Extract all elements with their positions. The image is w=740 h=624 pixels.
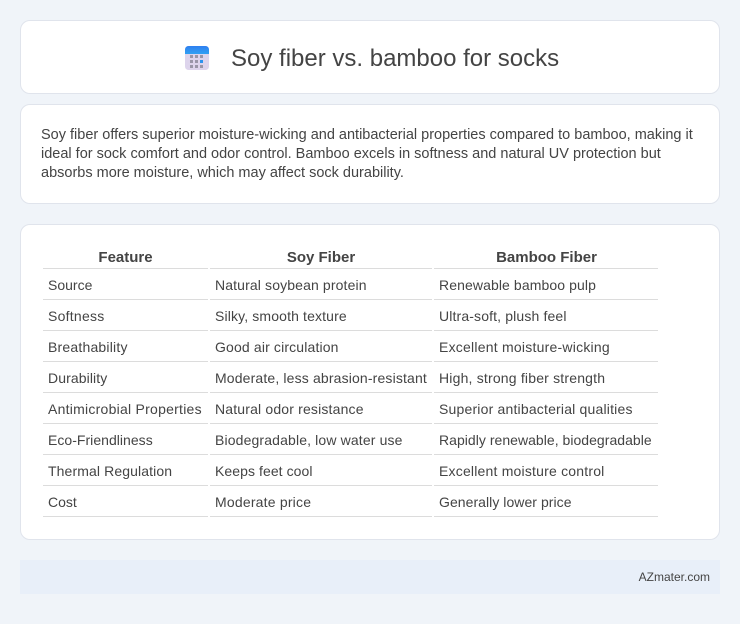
row: Source: Source xyxy=(48,277,92,293)
icon: calendar xyxy=(185,46,209,70)
row: Softness xyxy=(48,308,567,324)
panel: comparison table card xyxy=(20,224,720,540)
header: Bamboo Fiber: Bamboo Fiber xyxy=(496,249,597,266)
row: Softness: Ultra-soft, plush feel xyxy=(439,308,567,324)
row: Cost xyxy=(48,494,572,510)
row: Source: Renewable bamboo pulp xyxy=(439,277,596,293)
title: Soy fiber vs. bamboo for socks xyxy=(231,45,559,72)
row: Durability: Moderate, less abrasion-resistant xyxy=(215,370,427,386)
row: Eco-Friendliness xyxy=(48,432,652,448)
footer bar xyxy=(20,560,720,594)
panel: title card xyxy=(20,20,720,94)
summary text xyxy=(41,127,693,181)
row: Durability: Durability xyxy=(48,370,107,386)
row: Source: Natural soybean protein xyxy=(215,277,367,293)
row: Breathability xyxy=(48,339,610,355)
row: Breathability: Excellent moisture-wicking xyxy=(439,339,610,355)
row: Cost: Cost xyxy=(48,494,77,510)
summary text: Soy fiber offers superior moisture-wicking and antibacterial properties compared to bamboo, making it xyxy=(41,127,693,143)
row: Eco-Friendliness: Eco-Friendliness xyxy=(48,432,153,448)
row: Thermal Regulation: Keeps feet cool xyxy=(215,463,313,479)
row: Thermal Regulation: Excellent moisture control xyxy=(439,463,604,479)
row: Antimicrobial Properties: Superior antibacterial qualities xyxy=(439,401,633,417)
row: Antimicrobial Properties xyxy=(48,401,633,417)
row: Eco-Friendliness: Biodegradable, low water use xyxy=(215,432,403,448)
footer credit: AZmater.com xyxy=(639,570,710,584)
row: Source xyxy=(48,277,596,293)
header: Soy Fiber: Soy Fiber xyxy=(287,249,355,266)
row: Softness: Silky, smooth texture xyxy=(215,308,347,324)
row: Cost: Generally lower price xyxy=(439,494,572,510)
row: Antimicrobial Properties: Natural odor resistance xyxy=(215,401,364,417)
summary text: ideal for sock comfort and odor control. Bamboo excels in softness and natural UV protection but xyxy=(41,146,661,162)
row: Breathability: Good air circulation xyxy=(215,339,339,355)
row: Durability xyxy=(48,370,605,386)
row: Softness: Softness xyxy=(48,308,104,324)
panel: summary card xyxy=(20,104,720,204)
row: Thermal Regulation xyxy=(48,463,604,479)
row: Antimicrobial Properties: Antimicrobial Properties xyxy=(48,401,202,417)
row: Cost: Moderate price xyxy=(215,494,311,510)
row: Thermal Regulation: Thermal Regulation xyxy=(48,463,172,479)
row: Breathability: Breathability xyxy=(48,339,128,355)
row: Eco-Friendliness: Rapidly renewable, biodegradable xyxy=(439,432,652,448)
row: Durability: High, strong fiber strength xyxy=(439,370,605,386)
summary text: absorbs more moisture, which may affect sock durability. xyxy=(41,165,404,181)
header: Feature: Feature xyxy=(98,249,153,266)
